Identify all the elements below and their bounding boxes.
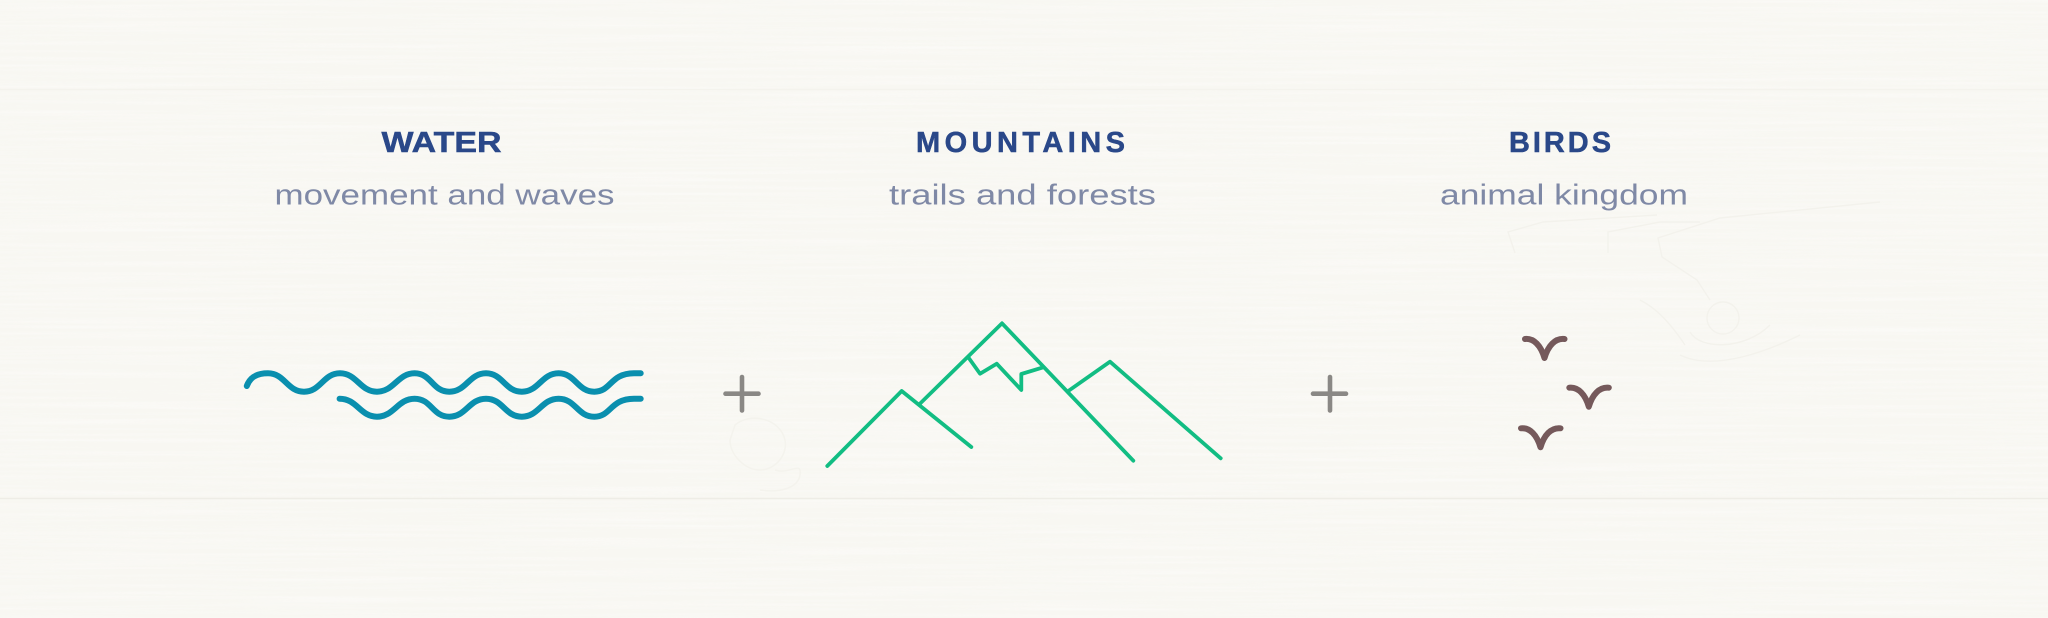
icon: plus between water and mountains [726,377,758,410]
icon: birds [1521,339,1609,447]
heading: water: WATER [382,127,502,159]
subheading: animal kingdom: animal kingdom [1440,180,1688,212]
subheading: movement and waves: movement and waves [274,180,614,212]
icon: plus between mountains and birds [1313,377,1346,410]
heading: mountains: MOUNTAINS [916,127,1125,159]
icon: mountains [827,323,1221,466]
heading: birds: BIRDS [1509,127,1614,159]
icon: water waves [247,373,641,417]
subheading: trails and forests: trails and forests [889,180,1156,212]
